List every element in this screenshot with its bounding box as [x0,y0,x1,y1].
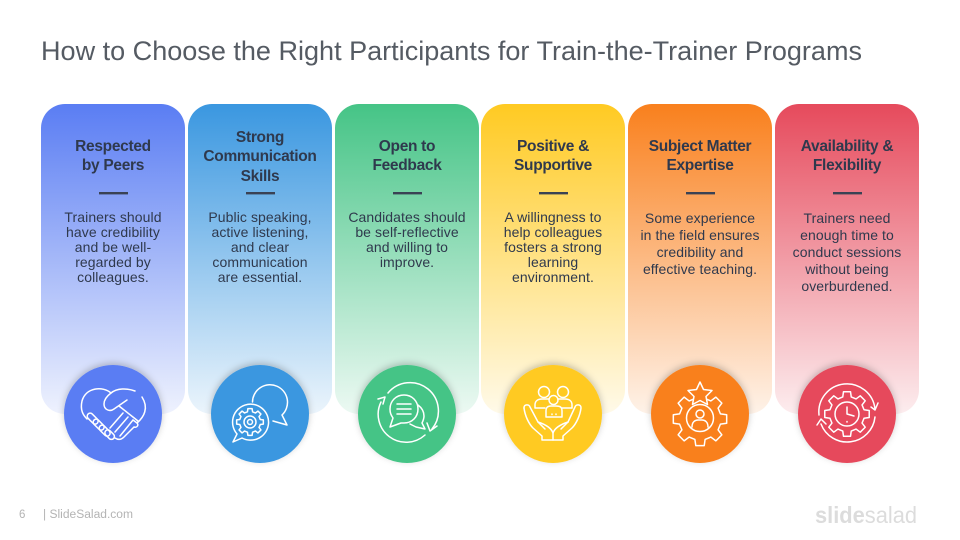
heading: Skills [241,168,279,185]
body text: effective teaching. [643,261,757,277]
card background [188,104,332,414]
heading: Subject Matter [649,138,752,155]
body text: in the field ensures [640,227,760,243]
divider [246,192,275,194]
icon circle: hands holding people [504,365,602,463]
body text: conduct sessions [793,244,901,260]
card background [775,104,919,414]
heading: Availability & [801,138,893,155]
body text: improve. [380,254,434,270]
heading: Positive & [517,138,589,155]
card background [481,104,625,414]
icon circle: gear clock cycle [798,365,896,463]
body text: colleagues. [77,269,149,285]
footer source: | SlideSalad.com [43,509,133,521]
card background [335,104,479,414]
card background [41,104,185,414]
body text: and be well- [75,239,151,255]
heading: Feedback [372,157,442,174]
body text: fosters a strong [504,239,602,255]
panel: availability and flexibility [775,104,919,463]
divider [833,192,862,194]
body text: credibility and [657,244,743,260]
panel: open to feedback [335,104,479,463]
body text: Public speaking, [208,209,312,225]
heading: Expertise [666,157,734,174]
body text: Some experience [645,210,755,226]
body text: overburdened. [801,278,893,294]
heading: Strong [236,129,284,146]
body text: and clear [231,239,289,255]
heading: Communication [203,148,317,165]
panel: strong communication skills [188,104,332,463]
body text: and willing to [366,239,448,255]
divider [393,192,422,194]
body text: without being [804,261,889,277]
page number: 6 [19,509,25,521]
logo: slidesalad [815,502,917,528]
panel: positive and supportive [481,104,625,463]
body text: are essential. [218,269,302,285]
body text: enough time to [800,227,894,243]
body text: help colleagues [504,224,602,240]
body text: Trainers should [64,209,162,225]
title: How to Choose the Right Participants for Train-the-Trainer Programs [41,36,862,66]
heading: by Peers [82,157,144,174]
heading: Flexibility [813,157,882,174]
panel: respected by peers [41,104,185,463]
icon circle: handshake heart [64,365,162,463]
body text: Candidates should [348,209,466,225]
body text: be self-reflective [355,224,459,240]
body text: environment. [512,269,594,285]
body text: learning [528,254,578,270]
divider [539,192,568,194]
heading: Respected [75,138,151,155]
body text: have credibility [66,224,160,240]
icon circle: gear person star [651,365,749,463]
body text: communication [212,254,308,270]
body text: A willingness to [504,209,602,225]
body text: active listening, [211,224,309,240]
body text: regarded by [75,254,151,270]
icon circle: gear speech bubbles [211,365,309,463]
heading: Supportive [514,157,593,174]
divider [686,192,715,194]
heading: Open to [379,138,435,155]
panel: subject matter expertise [628,104,772,463]
body text: Trainers need [804,210,890,226]
divider [99,192,128,194]
icon circle: feedback cycle [358,365,456,463]
card background [628,104,772,414]
